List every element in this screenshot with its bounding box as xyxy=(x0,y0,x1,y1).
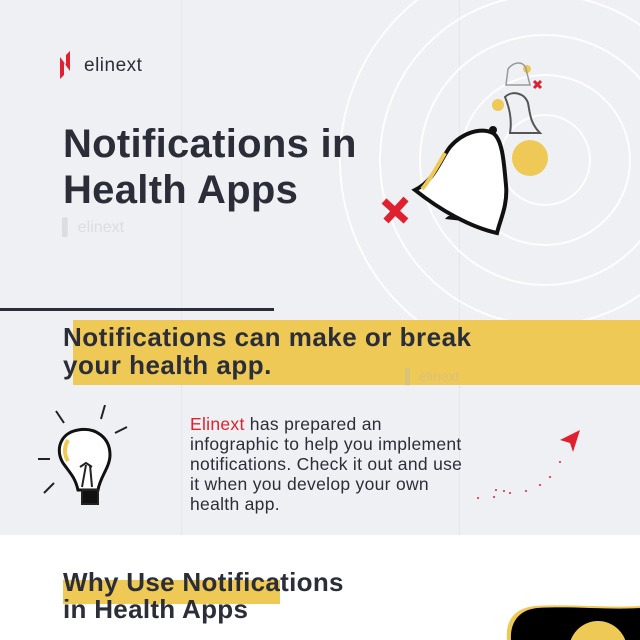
headline xyxy=(63,322,472,380)
yellow highlight band xyxy=(73,320,640,385)
title: Notifications in xyxy=(63,122,357,166)
section heading xyxy=(63,567,344,624)
section heading: Why Use Notifications xyxy=(63,567,344,597)
logo: elinext xyxy=(84,55,142,76)
paragraph: notifications. Check it out and use xyxy=(190,454,462,474)
icon: red cross xyxy=(382,196,408,224)
paragraph: infographic to help you implement xyxy=(190,434,462,454)
divider bar xyxy=(0,308,274,311)
section heading: in Health Apps xyxy=(63,594,248,624)
paragraph: health app. xyxy=(190,494,280,514)
decorative black blob xyxy=(506,605,640,640)
paragraph: Elinext has prepared an xyxy=(190,414,382,434)
headline: Notifications can make or break xyxy=(63,322,472,352)
logo xyxy=(60,51,142,79)
title: Health Apps xyxy=(63,168,298,212)
icon: paper plane with dotted trail xyxy=(477,430,580,499)
paragraph: it when you develop your own xyxy=(190,474,429,494)
icon: lightbulb xyxy=(38,405,128,505)
paragraph xyxy=(190,414,462,514)
watermark: ▌ elinext xyxy=(405,368,459,384)
title xyxy=(63,122,357,212)
section heading highlight xyxy=(63,580,280,604)
decorative vertical panel lines xyxy=(181,0,182,535)
icon: bells xyxy=(411,62,548,236)
watermark logo: ▌ elinext xyxy=(62,219,124,236)
headline: your health app. xyxy=(63,350,272,380)
